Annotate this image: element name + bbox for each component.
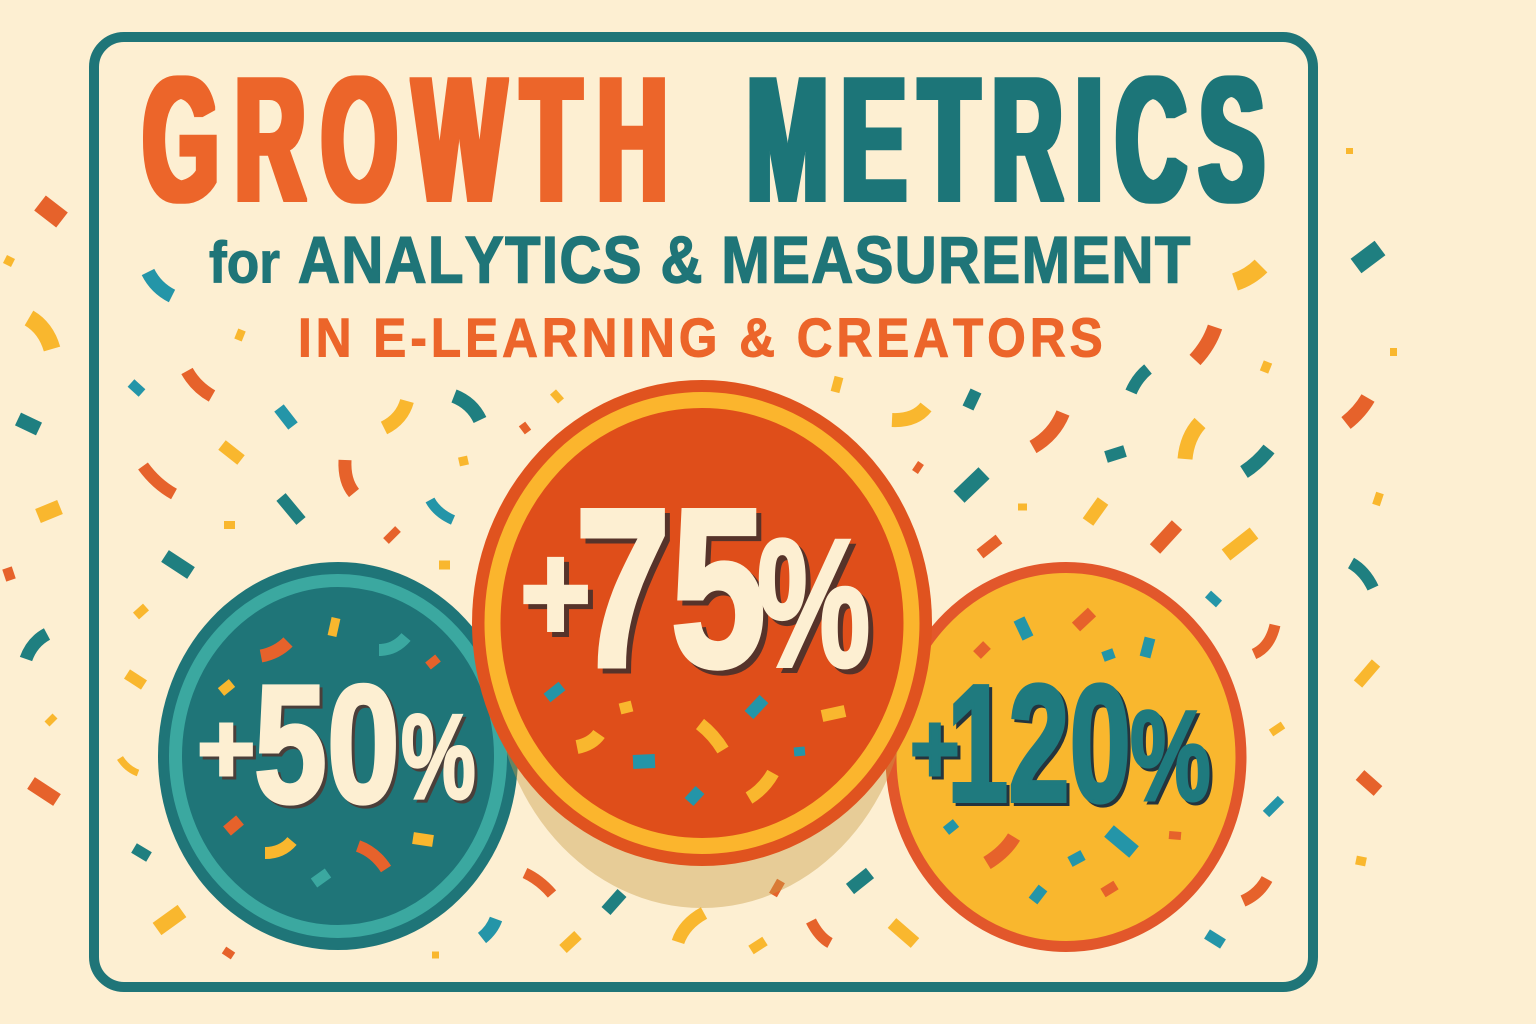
shadow below large circle: [494, 436, 910, 908]
value: +50%: 50: [254, 650, 400, 838]
metric circle: +50%: [158, 562, 518, 950]
value: +50%: +: [197, 693, 255, 805]
value: +75%: 75: [575, 461, 766, 714]
confetti inside yellow circle: [946, 612, 1181, 901]
tagline: IN E-LEARNING & CREATORS: [298, 308, 1103, 369]
metric circle: +120%: [891, 568, 1241, 946]
value: +75%: [520, 461, 870, 714]
confetti inside red circle: [547, 686, 845, 802]
title: GROWTH: [143, 42, 684, 239]
value: +120%: %: [1130, 685, 1211, 828]
subtitle: ANALYTICS & MEASUREMENT: [298, 224, 1190, 297]
confetti background: [5, 151, 1397, 956]
metric circle: +75%: [472, 380, 932, 866]
value: +75%: +: [520, 514, 591, 671]
value: +75%: %: [757, 503, 870, 705]
value: +120%: +: [910, 692, 960, 805]
title: [143, 42, 1277, 239]
subtitle: for: [209, 230, 280, 296]
value: +50%: %: [401, 689, 476, 823]
value: +120%: [910, 650, 1211, 836]
title: METRICS: [747, 42, 1277, 239]
value: +120%: 120: [947, 650, 1131, 836]
value: +50%: [197, 650, 476, 838]
confetti inside teal circle: [221, 618, 438, 883]
frame: [94, 37, 1313, 987]
